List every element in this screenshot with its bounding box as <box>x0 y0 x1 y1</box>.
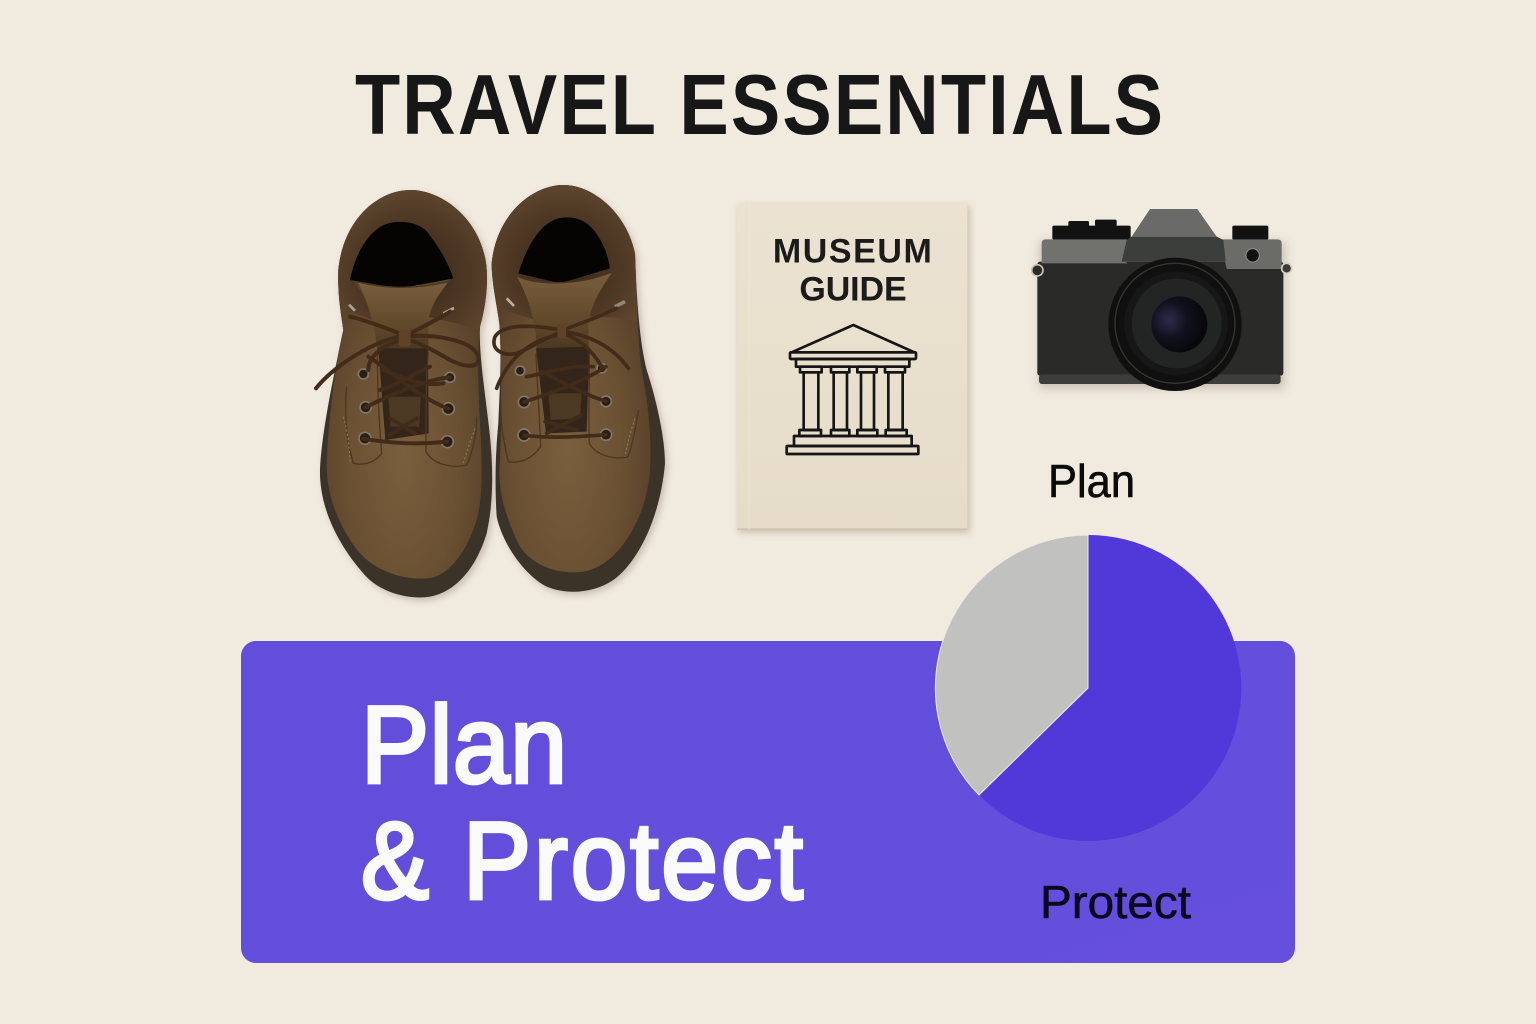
panel heading: Plan: Plan <box>361 684 567 806</box>
hiking boots <box>316 185 668 601</box>
left boot <box>316 190 495 601</box>
dials <box>1052 220 1268 240</box>
pie chart <box>935 535 1241 841</box>
title: TRAVEL ESSENTIALS <box>355 56 1163 152</box>
book title: GUIDE <box>799 271 907 309</box>
eyelets <box>358 369 455 448</box>
lugs <box>1032 265 1043 276</box>
eyelets <box>515 364 612 441</box>
lens <box>1108 258 1242 391</box>
laces <box>494 308 628 437</box>
panel: plan and protect <box>241 641 1295 963</box>
pie label: Protect: Protect <box>1040 876 1191 928</box>
pie label: Plan: Plan <box>1048 455 1135 507</box>
laces <box>316 312 478 443</box>
viewfinder prism <box>1132 209 1217 237</box>
camera <box>1032 209 1292 391</box>
museum guide book <box>737 204 970 533</box>
book cover <box>737 204 967 530</box>
eyelet flaps <box>346 352 477 466</box>
book title <box>773 233 932 309</box>
icon: museum temple <box>787 325 918 454</box>
pie slice: protect <box>979 535 1241 841</box>
book title: MUSEUM <box>773 233 932 271</box>
pie slice: plan <box>935 535 1088 795</box>
camera body <box>1037 262 1283 376</box>
top plate <box>1042 239 1127 263</box>
right boot <box>492 185 668 595</box>
panel heading: & Protect: & Protect <box>361 800 803 922</box>
eyelet flaps <box>501 352 638 462</box>
